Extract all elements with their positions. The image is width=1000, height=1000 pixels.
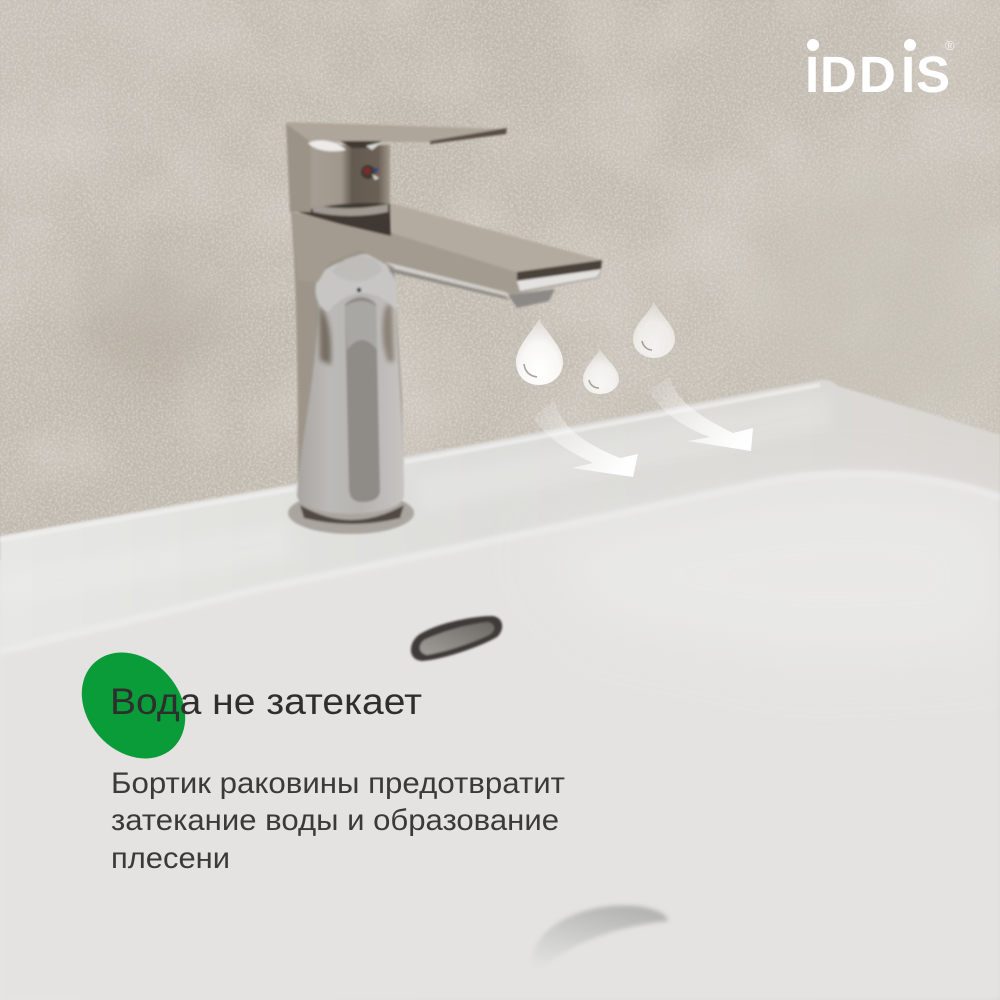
basin rim (0, 380, 1000, 1000)
drop right (633, 302, 675, 358)
temperature indicator (361, 165, 379, 180)
description text: затекание воды и образование (111, 804, 559, 837)
description text (111, 767, 565, 875)
water drops (516, 302, 675, 394)
washbasin (0, 380, 1000, 1000)
logo: IDDIS: ® (945, 38, 955, 53)
description text: плесени (111, 842, 230, 875)
arrows (533, 377, 753, 477)
faucet base (288, 492, 414, 534)
drop large (516, 319, 563, 385)
faucet body (297, 274, 404, 514)
handle lever (286, 122, 507, 212)
handle cylinder (311, 145, 390, 212)
arrow right (648, 377, 753, 451)
arrow left (533, 400, 638, 477)
faucet (286, 122, 602, 534)
aerator (508, 289, 555, 308)
drain (531, 906, 668, 968)
wall background (0, 0, 1000, 560)
heading: Вода не затекает (110, 681, 422, 722)
faucet back slab (291, 212, 404, 495)
spout (390, 203, 602, 272)
overflow hole (411, 616, 502, 661)
faucet neck highlight (316, 254, 397, 312)
logo: IDDIS: IDDIS (805, 46, 950, 103)
drop small (583, 349, 619, 394)
description text: Бортик раковины предотвратит (111, 767, 565, 800)
green accent blob (61, 632, 206, 779)
basin bowl (0, 474, 1000, 1000)
